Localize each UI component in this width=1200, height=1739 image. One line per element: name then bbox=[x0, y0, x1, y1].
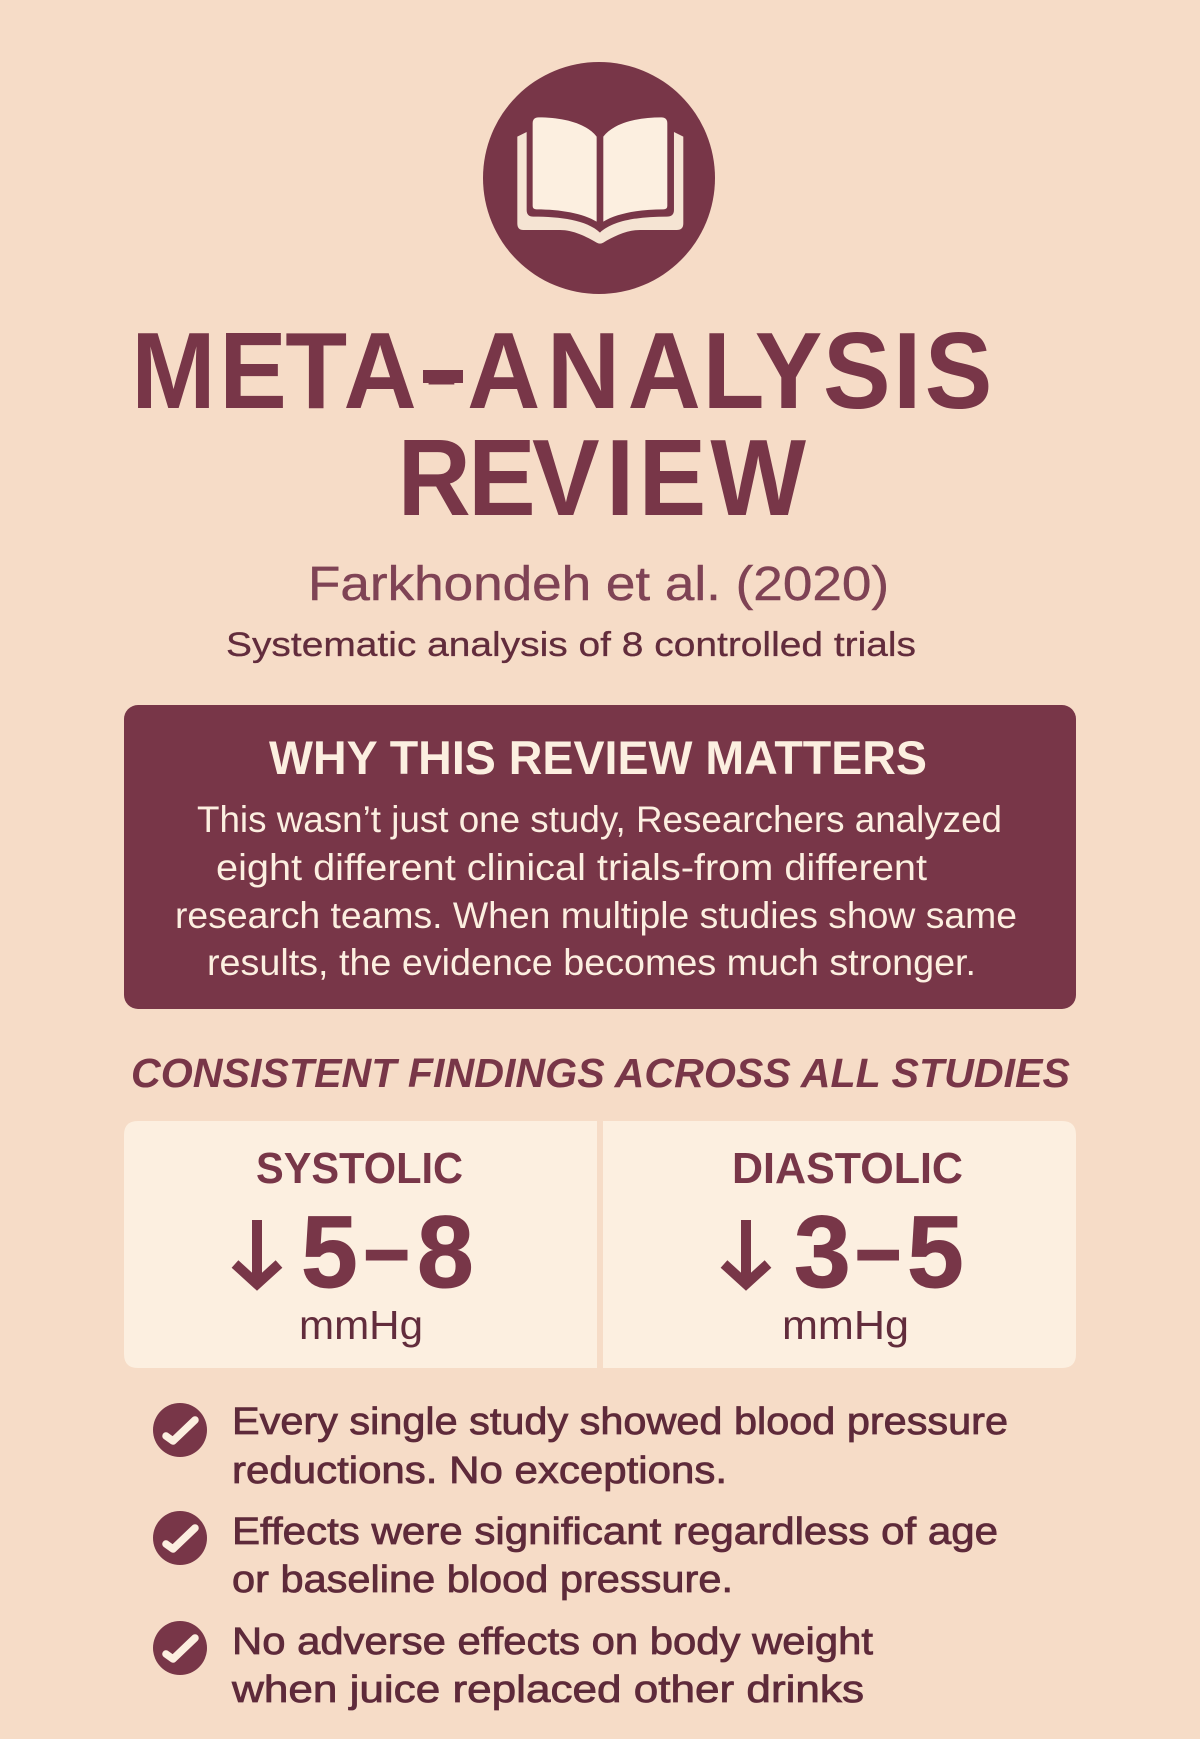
title: META-ANALYSIS bbox=[131, 309, 992, 432]
subtitle: authors: Farkhondeh et al. (2020) bbox=[308, 558, 889, 611]
icon: open book in circle bbox=[483, 62, 715, 294]
icon: down arrow bbox=[724, 1220, 768, 1284]
bullet: no adverse effects bbox=[153, 1621, 873, 1711]
card: diastolic bbox=[603, 1121, 1076, 1368]
icon: check bbox=[153, 1403, 207, 1457]
bullet text: Effects were significant regardless of age bbox=[232, 1511, 998, 1553]
subtitle: description: Systematic analysis of 8 controlled trials bbox=[226, 626, 916, 664]
diastolic value: – bbox=[856, 1205, 900, 1293]
panel heading: WHY THIS REVIEW MATTERS bbox=[269, 731, 927, 784]
bullet text: when juice replaced other drinks bbox=[231, 1669, 864, 1711]
title: REVIEW bbox=[398, 418, 807, 539]
bullet text: reductions. No exceptions. bbox=[232, 1450, 727, 1492]
panel body text bbox=[175, 799, 1017, 983]
systolic label: SYSTOLIC bbox=[256, 1144, 463, 1193]
panel: why this review matters bbox=[124, 705, 1076, 1009]
systolic unit: mmHg bbox=[299, 1302, 423, 1348]
icon: down arrow bbox=[235, 1220, 279, 1284]
diastolic value: 5 bbox=[907, 1195, 964, 1309]
diastolic label: DIASTOLIC bbox=[732, 1144, 963, 1193]
panel body text: eight different clinical trials-from different bbox=[216, 847, 928, 888]
diastolic value: 3 bbox=[794, 1195, 851, 1309]
diastolic unit: mmHg bbox=[782, 1302, 909, 1348]
bullet text bbox=[232, 1511, 998, 1601]
panel body text: results, the evidence becomes much stronger. bbox=[207, 942, 976, 983]
icon: check bbox=[153, 1511, 207, 1565]
bullet text: or baseline blood pressure. bbox=[232, 1559, 733, 1601]
icon: check bbox=[153, 1621, 207, 1675]
bullet text bbox=[231, 1621, 873, 1711]
bullet text: No adverse effects on body weight bbox=[232, 1621, 873, 1663]
card: systolic bbox=[124, 1121, 597, 1368]
bullet text bbox=[232, 1401, 1008, 1492]
title bbox=[131, 309, 992, 539]
systolic value: 5 bbox=[301, 1195, 358, 1309]
section heading: consistent findings: CONSISTENT FINDINGS ACROSS ALL STUDIES bbox=[131, 1050, 1070, 1096]
bullet: effects significant bbox=[153, 1511, 998, 1601]
systolic value: 8 bbox=[417, 1195, 474, 1309]
panel body text: research teams. When multiple studies show same bbox=[175, 895, 1017, 936]
panel body text: This wasn’t just one study, Researchers analyzed bbox=[197, 799, 1002, 840]
bullet text: Every single study showed blood pressure bbox=[232, 1401, 1008, 1443]
systolic value: – bbox=[365, 1205, 408, 1293]
bullet: every study bbox=[153, 1401, 1008, 1492]
